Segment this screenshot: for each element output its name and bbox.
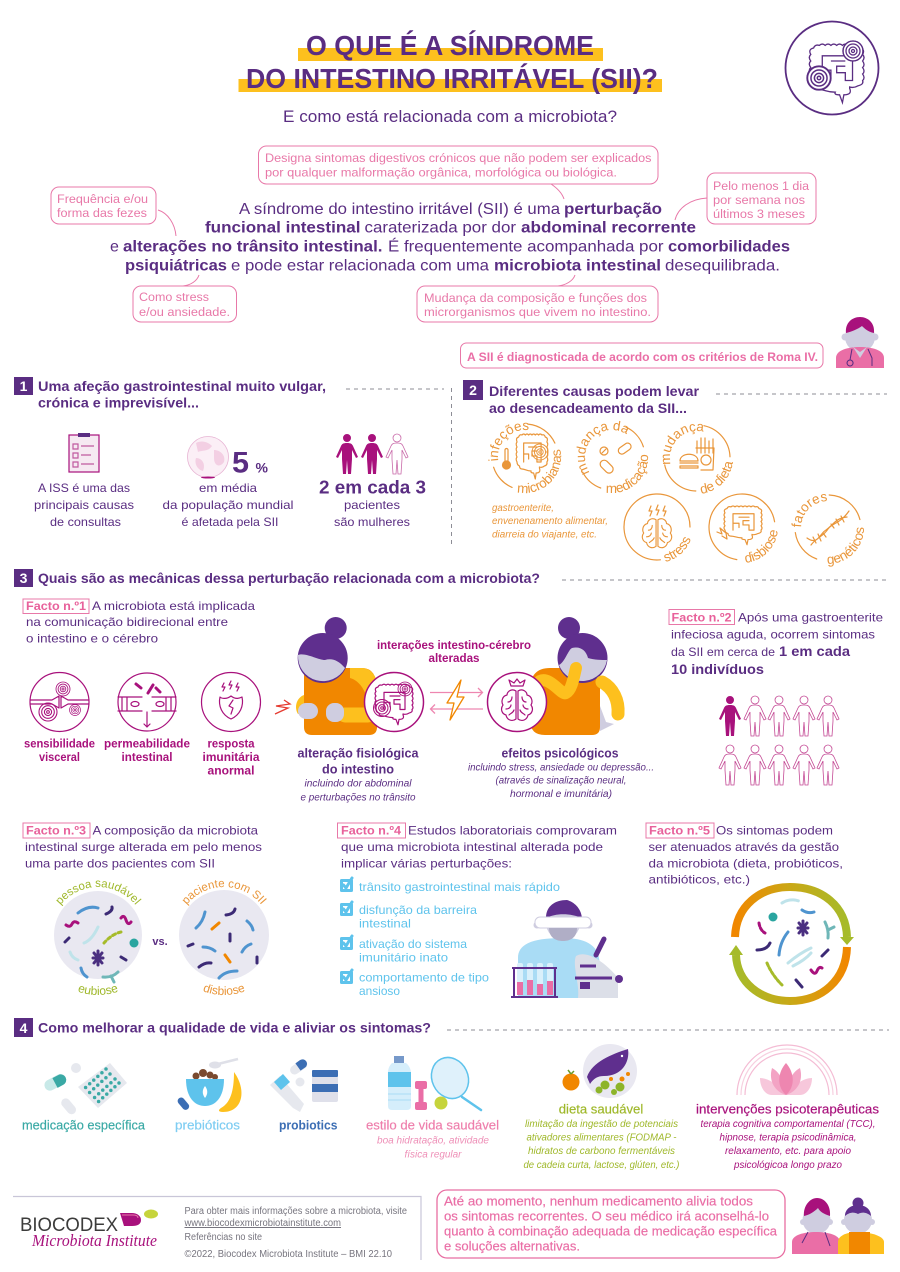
- panel: intestinal permeability: [104, 673, 190, 764]
- section 2 heading: [463, 380, 887, 416]
- panel: 5 percent stat: [162, 436, 294, 529]
- panel: specific medication: medicação específica: [22, 1118, 146, 1132]
- panel: fact 2: infeciosa aguda, ocorrem sintomas: [671, 628, 875, 642]
- icon: lightning: [447, 680, 464, 720]
- panel: stress: [623, 493, 691, 562]
- callout: Rome IV: [460, 343, 823, 368]
- callout: microbiota change: microrganismos que vivem no intestino.: [424, 305, 651, 319]
- section 1 heading: 1: [20, 378, 28, 394]
- section 4 heading: Como melhorar a qualidade de vida e aliviar os sintomas?: [38, 1020, 431, 1036]
- intro text block: e: [110, 238, 119, 256]
- illustration: scientist with microscope: [511, 900, 623, 998]
- chart: dysbiosis dish: disbiose: [204, 984, 244, 996]
- panel: healthy diet: de cadeia curta, lactose, glúten, etc.): [524, 1160, 680, 1171]
- panel: fact 3: Facto n.º3: [26, 824, 86, 838]
- callout: symptoms definition: Designa sintomas digestivos crónicos que não podem ser explicados: [265, 151, 652, 165]
- icon: stressed brain: [642, 505, 672, 548]
- text: physiological alteration: do intestino: [322, 762, 394, 776]
- panel: 5 percent stat: 5: [232, 446, 249, 480]
- panel: 2 in 3 stat: [319, 434, 426, 529]
- text: physiological alteration: e perturbações no trânsito: [300, 792, 416, 804]
- panel: fact 1: A microbiota está implicada: [92, 599, 255, 613]
- section 2 heading: ao desencadeamento da SII...: [489, 400, 687, 416]
- panel: visceral sensitivity: [24, 672, 95, 764]
- section 3 heading: Quais são as mecânicas dessa perturbação relacionada com a microbiota?: [38, 570, 540, 586]
- panel: fact 3: [23, 823, 262, 870]
- icon: intestine in circle: [786, 22, 878, 114]
- panel: probiotics: probiotics: [279, 1118, 338, 1132]
- icon: lotus with rainbow: [737, 1045, 837, 1095]
- section 4 heading: [14, 1018, 889, 1037]
- callout: stress: e/ou ansiedade.: [139, 305, 230, 319]
- icon: plate with fish: [562, 1044, 637, 1098]
- icon: gut: [717, 506, 762, 545]
- title text: DO INTESTINO IRRITÁVEL (SII)?: [246, 63, 658, 94]
- panel: fact 5: ser atenuados através da gestão: [648, 840, 839, 854]
- intro text block: abdominal recorrente: [521, 220, 696, 236]
- panel: fact 5: Facto n.º5: [649, 824, 710, 838]
- section 2 heading: Diferentes causas podem levar: [489, 383, 700, 399]
- icon: clipboard: [69, 433, 99, 472]
- checklist: ansioso: [359, 984, 400, 998]
- text: infection examples: diarreia do viajante, etc.: [492, 530, 597, 540]
- intro text block: [110, 201, 790, 274]
- panel: fact 3: intestinal surge alterada em pelo menos: [25, 840, 262, 854]
- panel: consultations stat: [34, 433, 134, 529]
- icon: visceral sensitivity: [30, 672, 89, 732]
- panel: fact 2: 1 em cada: [779, 643, 850, 659]
- panel: 2 in 3 stat: são mulheres: [334, 515, 410, 529]
- icon: doctor: [836, 317, 884, 368]
- intro text block: comorbilidades: [668, 238, 790, 256]
- chart: eubiosis dish: eubiose: [78, 986, 118, 995]
- panel: 2 in 3 stat: 2 em cada 3: [319, 476, 426, 498]
- panel: healthy lifestyle: estilo de vida saudável: [366, 1118, 499, 1132]
- text: infection examples: gastroenterite,: [492, 503, 554, 514]
- callout: stool: forma das fezes: [57, 206, 147, 220]
- callout: frequency: [675, 173, 816, 224]
- callout: frequency: últimos 3 meses: [713, 207, 805, 221]
- footer text: Para obter mais informações sobre a microbiota, visite: [184, 1206, 407, 1217]
- text: psychological effects: efeitos psicológicos: [502, 746, 619, 760]
- panel: fact 5: da microbiota (dieta, probióticos,: [648, 856, 843, 870]
- panel: fact 1: Facto n.º1: [26, 599, 86, 613]
- illustration: doctor and patient: [792, 1198, 884, 1254]
- panel: visceral sensitivity: sensibilidade: [24, 738, 95, 750]
- intro text block: alterações no trânsito intestinal.: [123, 238, 382, 256]
- intro text block: É frequentemente acompanhada por: [388, 236, 664, 256]
- panel: psychotherapy: [696, 1045, 880, 1171]
- panel: diet change: mudança: [662, 424, 704, 464]
- intro text block: microbiota intestinal: [494, 258, 661, 274]
- checklist: ativação do sistema: [359, 937, 467, 951]
- panel: healthy lifestyle: física regular: [404, 1150, 462, 1160]
- panel: medication change: [576, 420, 648, 493]
- callout: symptoms definition: [258, 146, 658, 199]
- panel: consultations stat: A ISS é uma das: [38, 481, 130, 495]
- text: infection examples: [492, 503, 608, 540]
- logo: Biocodex Microbiota Institute: [20, 1210, 158, 1250]
- panel: 2 in 3 stat: pacientes: [344, 498, 400, 512]
- panel: healthy diet: hidratos de carbono fermentáveis: [528, 1146, 675, 1157]
- panel: microbial infections: microbianas: [518, 450, 562, 494]
- panel: fact 3: A composição da microbiota: [92, 824, 258, 838]
- panel: immune response: anormal: [208, 766, 254, 778]
- panel: fact 4: que uma microbiota intestinal alterada pode: [341, 840, 603, 854]
- panel: healthy lifestyle: [366, 1051, 499, 1160]
- chart: dysbiosis dish: [179, 880, 269, 996]
- callout: stress: [133, 275, 236, 322]
- callout: symptoms definition: por qualquer malformação orgânica, morfológica ou biológica.: [265, 166, 617, 180]
- text: psychological effects: hormonal e imunitária): [510, 789, 612, 800]
- footer text: Referências no site: [184, 1232, 262, 1243]
- text: physiological alteration: [298, 746, 420, 804]
- panel: immune response: imunitária: [202, 752, 260, 764]
- section 1 heading: [14, 377, 444, 410]
- icon: pills: [599, 442, 632, 475]
- title: [238, 30, 662, 94]
- panel: healthy diet: dieta saudável: [559, 1102, 643, 1116]
- panel: immune response: [202, 672, 260, 778]
- panel: 5 percent stat: da população mundial: [162, 498, 294, 512]
- text: physiological alteration: incluindo dor abdominal: [304, 778, 412, 790]
- icon: cracked shield: [202, 672, 260, 732]
- icon: ten people: [719, 696, 839, 785]
- panel: 5 percent stat: %: [256, 460, 268, 476]
- icon: bowl and banana: [176, 1059, 242, 1112]
- text: psychological effects: [468, 746, 654, 800]
- checklist: trânsito gastrointestinal mais rápido: [359, 880, 560, 894]
- panel: dysbiosis: [708, 493, 778, 563]
- panel: intestinal permeability: permeabilidade: [104, 738, 190, 750]
- callout: stool: Frequência e/ou: [57, 192, 148, 206]
- panel: probiotics: [270, 1058, 338, 1132]
- panel: healthy diet: [524, 1044, 680, 1171]
- text: infection examples: envenenamento alimentar,: [492, 516, 608, 527]
- panel: fact 5: Os sintomas podem: [716, 824, 833, 838]
- panel: fact 2: Facto n.º2: [672, 610, 732, 624]
- panel: genetic factors: fatores: [792, 494, 827, 527]
- test tube rack: [511, 963, 558, 997]
- panel: healthy diet: limitação da ingestão de potenciais: [525, 1119, 678, 1130]
- icon: burger and fries: [680, 438, 714, 470]
- callout: Rome IV: A SII é diagnosticada de acordo com os critérios de Roma IV.: [467, 350, 818, 364]
- panel: medication change: mudança da: [576, 420, 628, 475]
- callout: stress: Como stress: [139, 290, 209, 304]
- footer text: www.biocodexmicrobiotainstitute.com: [184, 1218, 341, 1229]
- label: altered interactions: [377, 640, 531, 665]
- panel: fact 4: Estudos laboratoriais comprovaram: [408, 824, 617, 838]
- chart: microbiota ring with arrows: [729, 887, 854, 1001]
- panel: microbial infections: infeções: [488, 422, 528, 461]
- panel: 5 percent stat: em média: [199, 481, 257, 495]
- panel: stress: stress: [664, 537, 690, 562]
- icon: permeability: [118, 673, 176, 731]
- panel: medication change: medicação: [606, 454, 648, 493]
- panel: 5 percent stat: é afetada pela SII: [182, 515, 278, 529]
- chart: dysbiosis dish: paciente com SII: [182, 880, 267, 906]
- illustration: woman with abdominal pain: [275, 617, 424, 735]
- logo: Biocodex Microbiota Institute: Microbiota Institute: [31, 1231, 157, 1250]
- panel: psychotherapy: intervenções psicoterapêuticas: [696, 1102, 880, 1116]
- section 2 heading: 2: [469, 382, 477, 398]
- text: psychological effects: incluindo stress, ansiedade ou depressão...: [468, 762, 654, 774]
- panel: fact 2: da SII em cerca de: [671, 645, 775, 659]
- panel: psychotherapy: hipnose, terapia psicodinâmica,: [720, 1132, 856, 1144]
- panel: fact 4: [338, 823, 617, 998]
- intro text block: A síndrome do intestino irritável (SII) é uma: [239, 201, 560, 218]
- footer text: [184, 1206, 407, 1260]
- footer: divider frame: [13, 1196, 421, 1260]
- panel: fact 1: o intestino e o cérebro: [26, 632, 158, 646]
- illustration: woman with psychological effects: [488, 617, 618, 735]
- intro text block: e pode estar relacionada com uma: [231, 258, 489, 274]
- panel: diet change: de dieta: [700, 462, 733, 494]
- icon: bottle dumbbell racket: [388, 1051, 481, 1110]
- panel: fact 4: Facto n.º4: [341, 824, 401, 838]
- text: psychological effects: (através de sinalização neural,: [496, 776, 626, 786]
- panel: specific medication: [22, 1063, 146, 1132]
- callout: stool: [51, 187, 176, 236]
- section 3 heading: 3: [20, 570, 28, 586]
- icon: DNA: [807, 511, 849, 545]
- icon: globe: [188, 436, 228, 478]
- chart: eubiosis dish: pessoa saudável: [56, 880, 142, 906]
- icon: three people: [336, 434, 408, 474]
- icon: brain in circle: [488, 672, 546, 732]
- checklist: [342, 878, 560, 998]
- label: altered interactions: interações intestino-cérebro: [377, 640, 531, 652]
- panel: diet change: [662, 424, 733, 494]
- intro text block: psiquiátricas: [125, 258, 227, 274]
- panel: fact 2: 10 indivíduos: [671, 661, 764, 677]
- arrows: gut-brain axis: [430, 688, 483, 714]
- panel: fact 4: implicar várias perturbações:: [341, 856, 512, 870]
- checklist: intestinal: [359, 916, 411, 930]
- panel: fact 5: [646, 823, 843, 886]
- section 1 heading: Uma afeção gastrointestinal muito vulgar,: [38, 378, 326, 394]
- icon: blister and pills: [42, 1063, 127, 1116]
- icon: pain zigzag: [275, 700, 290, 714]
- checklist: disfunção da barreira: [359, 903, 477, 917]
- icon: thermometer and gut: [502, 434, 548, 479]
- intro text block: perturbação: [564, 201, 662, 218]
- panel: definition callouts: [51, 146, 816, 322]
- panel: visceral sensitivity: visceral: [39, 752, 80, 764]
- section 3 heading: [14, 569, 889, 587]
- panel: genetic factors: genéticos: [828, 528, 864, 567]
- callout: frequency: Pelo menos 1 dia: [713, 179, 809, 193]
- callout: medication advice: Até ao momento, nenhum medicamento alivia todos: [444, 1194, 753, 1208]
- label: versus: vs.: [152, 936, 168, 948]
- checklist: comportamento de tipo: [359, 970, 489, 984]
- panel: fact 1: [23, 599, 255, 646]
- title text: O QUE É A SÍNDROME: [306, 30, 594, 61]
- intro text block: funcional intestinal: [205, 220, 360, 236]
- intro text block: desequilibrada.: [665, 258, 780, 274]
- callout: frequency: por semana nos: [713, 193, 805, 207]
- panel: healthy diet: ativadores alimentares (FODMAP -: [526, 1132, 677, 1144]
- panel: fact 1: na comunicação bidirecional entre: [26, 615, 228, 629]
- panel: microbial infections: [488, 422, 562, 494]
- chart: eubiosis dish: [54, 880, 142, 995]
- panel: fact 2: [669, 610, 883, 785]
- panel: prebiotics: prebióticos: [175, 1118, 241, 1132]
- section 1 heading: crónica e imprevisível...: [38, 394, 199, 410]
- text: physiological alteration: alteração fisiológica: [298, 746, 420, 760]
- callout: medication advice: [437, 1190, 785, 1258]
- panel: healthy lifestyle: boa hidratação, atividade: [377, 1136, 489, 1146]
- panel: fact 5: antibióticos, etc.): [648, 872, 750, 886]
- callout: microbiota change: [417, 275, 658, 322]
- panel: consultations stat: principais causas: [34, 498, 134, 512]
- label: altered interactions: alteradas: [428, 653, 480, 665]
- subtitle: E como está relacionada com a microbiota?: [283, 108, 617, 126]
- panel: consultations stat: de consultas: [50, 515, 121, 529]
- panel: dysbiosis: disbiose: [745, 530, 778, 563]
- panel: intestinal permeability: intestinal: [122, 752, 172, 764]
- panel: psychotherapy: terapia cognitiva comportamental (TCC),: [700, 1119, 876, 1130]
- section 4 heading: 4: [20, 1020, 28, 1036]
- callout: medication advice: quanto à combinação adequada de medicação específica: [444, 1224, 777, 1238]
- panel: fact 2: Após uma gastroenterite: [738, 610, 883, 624]
- icon: gut in circle: [364, 672, 424, 732]
- panel: psychotherapy: relaxamento, etc. para apoio: [725, 1146, 851, 1157]
- callout: microbiota change: Mudança da composição e funções dos: [424, 291, 647, 305]
- checklist: imunitário inato: [359, 950, 448, 964]
- panel: genetic factors: [792, 494, 864, 567]
- title highlight bars: [238, 48, 662, 92]
- callout: medication advice: e soluções alternativas.: [444, 1240, 580, 1254]
- intro text block: caraterizada por dor: [364, 220, 517, 236]
- title text: [246, 30, 658, 94]
- callout: medication advice: os sintomas recorrentes. O seu médico irá aconselhá-lo: [444, 1210, 769, 1224]
- panel: prebiotics: [175, 1059, 242, 1132]
- icon: tube and jar: [270, 1058, 338, 1112]
- logo: Biocodex Microbiota Institute: BIOCODEX: [20, 1215, 118, 1236]
- panel: immune response: resposta: [208, 738, 255, 750]
- panel: fact 3: uma parte dos pacientes com SII: [25, 856, 215, 870]
- panel: psychotherapy: psicológicoa longo prazo: [733, 1160, 842, 1171]
- footer text: ©2022, Biocodex Microbiota Institute – BMI 22.10: [184, 1249, 392, 1260]
